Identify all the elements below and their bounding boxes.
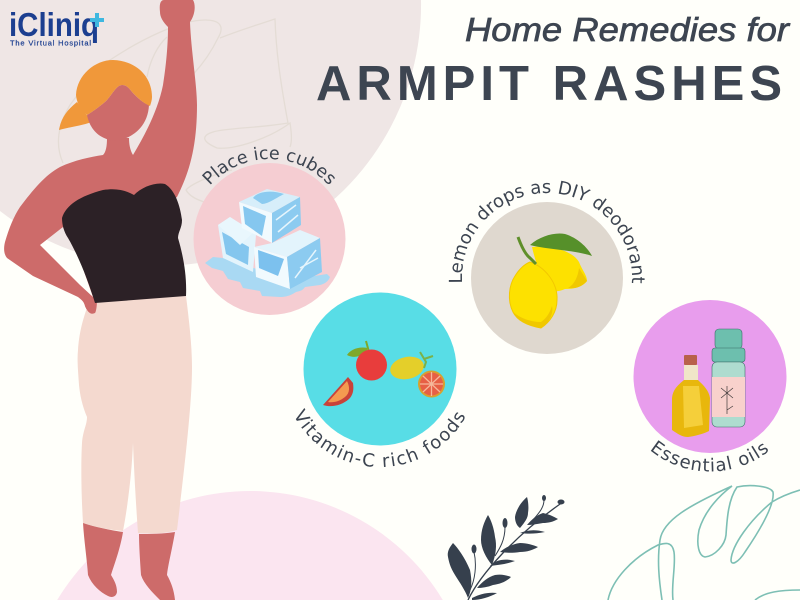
pants (78, 296, 192, 534)
title: ARMPIT RASHES (316, 57, 782, 111)
label: vitamin-c rich foods: Vitamin-C rich foods (296, 408, 465, 467)
panel: place ice cubes (194, 146, 346, 315)
head (87, 85, 149, 141)
label: place ice cubes: Place ice cubes (202, 146, 335, 184)
left foot (83, 523, 123, 597)
background circle: beige (0, 0, 421, 266)
label: lemon drops as diy deodorant: Lemon drops as DIY deodorant (448, 180, 645, 284)
icon: lemons (509, 233, 592, 328)
decorative teal leaf outlines (608, 486, 800, 600)
right foot (139, 532, 175, 600)
panel: lemon drops (448, 180, 645, 354)
background circle: pink (57, 491, 443, 600)
hair (76, 60, 152, 115)
panel: essential oils (634, 300, 786, 472)
title (316, 11, 791, 111)
logo: The Virtual Hospital (10, 38, 91, 48)
logo: iCliniq (9, 6, 99, 43)
logo plus sign (90, 13, 104, 27)
decorative plant sprig (448, 495, 564, 600)
icon: ice cubes (205, 189, 330, 297)
label: essential oils: Essential oils (650, 440, 768, 472)
ponytail (59, 102, 92, 130)
woman figure (4, 0, 197, 600)
icon: oil bottles (672, 329, 745, 437)
body skin (4, 0, 197, 314)
title: Home Remedies for (465, 11, 791, 48)
icon: fruits (323, 341, 445, 406)
hand overlapping pants (84, 296, 97, 314)
decorative leaf outlines (59, 19, 292, 203)
strapless top (62, 184, 186, 303)
panel: vitamin-c rich foods (296, 292, 465, 467)
